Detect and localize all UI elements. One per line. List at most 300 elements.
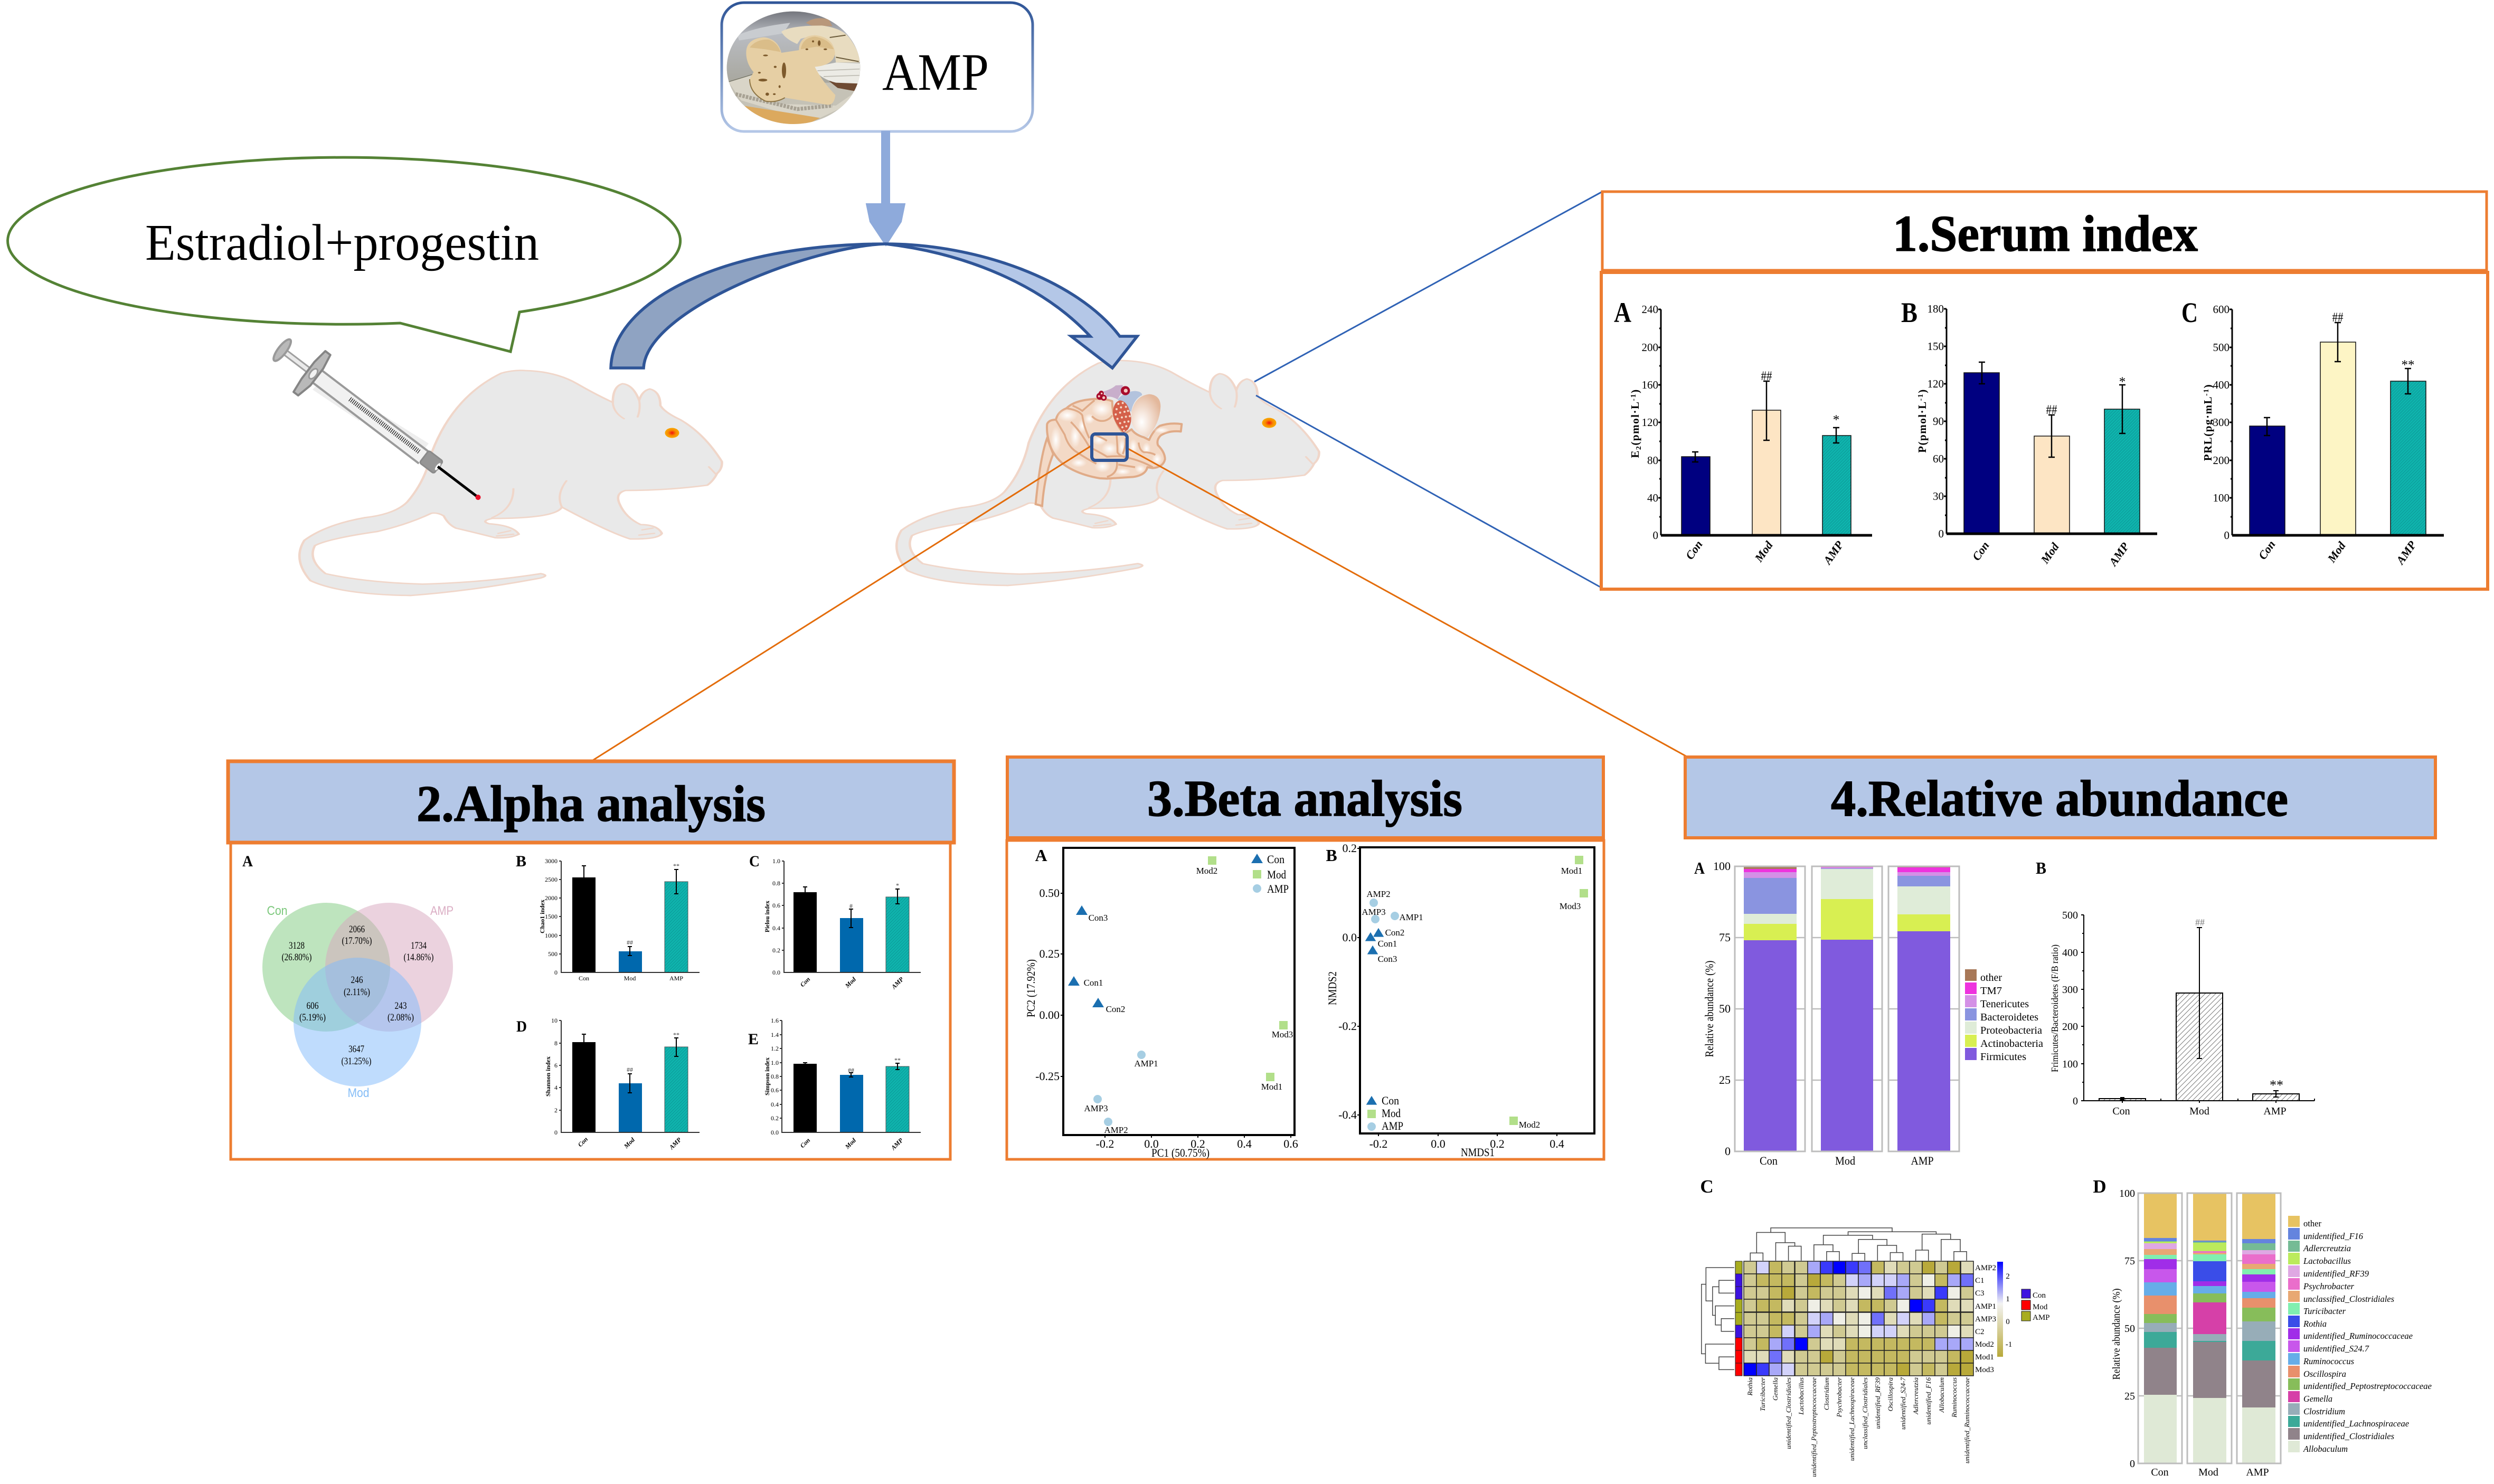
chart: Simpson bars: 1.4 [771,1031,779,1038]
chart: F/B ratio bars: ## [2195,917,2205,928]
chart: Pielou bars: Pielou index [763,901,771,932]
chart: PRL bars: 500 [2213,341,2230,354]
chart: Simpson bars: AMP [889,1136,905,1152]
chart: Venn diagram: 1734 [411,940,427,951]
chart: Chao1 bars: ** [673,862,679,869]
chart: Venn diagram: (5.19%) [299,1012,326,1023]
heatmap dendrogram: columns [1750,1228,1967,1261]
chart: Venn diagram: (2.08%) [388,1012,414,1023]
chart: Chao1 bars: 1500 [545,913,558,920]
chart: Chao1 bars: ## [627,939,633,946]
chart: NMDS scatter: Con [1382,1094,1399,1107]
chart: Chao1 bars: B [516,853,526,870]
heatmap row labels: C2 [1975,1328,1985,1336]
chart: PCoA scatter: Mod [1267,868,1286,881]
legend: phyla: Proteobacteria [1980,1025,2042,1036]
connector lines: gut to panels [593,446,1696,762]
chart: Shannon bars: D [516,1018,527,1035]
chart: genus stacked bars: D [2093,1176,2106,1197]
chart: PRL bars: 600 [2213,303,2230,316]
chart: Venn diagram: 243 [395,1000,407,1012]
heatmap column labels: unidentified_Clostridiales [1784,1377,1792,1449]
chart: PRL bars [2181,297,2444,568]
chart: NMDS scatter: 0.0 [1342,931,1357,944]
legend: genera: Lactobacillus [2303,1256,2351,1266]
legend: genera: unidentified_Clostridiales [2303,1431,2394,1441]
chart: NMDS scatter: NMDS1 [1461,1146,1495,1159]
chart: NMDS scatter: -0.4 [1338,1108,1357,1121]
heatmap column labels: Adlercreutzia [1912,1377,1920,1415]
chart: Venn diagram: 3647 [348,1044,364,1055]
chart: Shannon bars: Con [577,1136,589,1148]
chart: Simpson bars: 0.6 [771,1086,779,1094]
heatmap column labels: Psychrobacter [1835,1377,1843,1417]
chart: E2 bars: E [1629,450,1641,458]
chart: Chao1 bars: AMP [669,975,683,982]
chart: Pielou bars: AMP [890,975,905,991]
chart: genus stacked bars: 75 [2124,1255,2135,1267]
chart: E2 bars: 0 [1652,529,1658,542]
chart: Chao1 bars: Con [579,975,589,982]
heatmap column labels: unidentified_S24-7 [1899,1377,1907,1430]
heatmap column labels: unidentified_F16 [1924,1377,1932,1425]
chart: NMDS scatter: 0.4 [1550,1137,1564,1150]
heatmap row labels: C1 [1975,1277,1985,1285]
legend: phyla: Bacteroidetes [1980,1012,2038,1023]
chart: PCoA scatter: -0.25 [1035,1070,1060,1083]
chart: P bars: P(pmol·L [1916,401,1929,453]
rat: treated model with organs [896,361,1319,585]
heatmap row labels: C3 [1975,1289,1985,1298]
panel 2: alpha analysis [228,761,954,1159]
chart: F/B ratio bars: 100 [2062,1058,2078,1070]
chart: phylum stacked bars: 0 [1725,1145,1731,1158]
chart: Simpson bars: 0.4 [771,1101,779,1108]
legend: genera: Rothia [2303,1319,2327,1329]
speech bubble: Estradiol+progestin: Estradiol+progestin [145,214,539,271]
chart: Chao1 bars: 1000 [545,932,558,939]
AMP box: AMP [882,43,989,101]
heatmap colour bar: 0 [2006,1318,2010,1326]
chart: PCoA scatter: 0.50 [1039,886,1060,900]
chart: E2 bars: A [1614,297,1631,328]
legend: genera: unidentified_Lachnospiraceae [2303,1419,2409,1429]
chart: phylum stacked bars: A [1694,858,1705,877]
chart: phylum stacked bars: 100 [1713,859,1731,873]
chart: Shannon bars: AMP [667,1136,683,1151]
chart: F/B ratio bars: 300 [2062,984,2078,996]
chart: P bars: -1 [1917,393,1925,401]
chart: PCoA scatter: 0.00 [1039,1008,1060,1022]
chart: PRL bars: Mod [2325,539,2348,565]
chart: genus stacked bars: 50 [2124,1323,2135,1335]
chart: E2 bars: -1 [1630,393,1638,401]
chart: P bars: Mod [2038,540,2062,566]
chart: PRL bars: 400 [2213,379,2230,391]
chart: Venn diagram: (26.80%) [282,952,311,963]
heatmap column labels: unidentified_Peptostreptococcaceae [1810,1377,1818,1477]
chart: PCoA scatter: AMP1 [1134,1058,1158,1069]
chart: PCoA scatter: AMP3 [1084,1103,1108,1113]
chart: Venn diagram: (2.11%) [344,987,370,998]
chart: E2 bars: 2 [1635,446,1643,450]
heatmap column labels [1746,1377,1971,1477]
legend: genera: Turicibacter [2303,1306,2346,1316]
panel 3: beta analysis [1007,757,1604,1159]
heatmap column labels: unidentified_Lachnospiraceae [1848,1377,1856,1461]
chart: F/B ratio bars: ** [2270,1077,2283,1093]
heatmap colour bar: -1 [2006,1340,2012,1349]
rat: injected model [299,371,722,596]
legend: phyla: Tenericutes [1980,998,2029,1010]
chart: Chao1 bars [516,853,700,982]
heading: 3.Beta analysis [1007,757,1603,838]
chart: NMDS scatter: AMP [1382,1119,1403,1132]
chart: P bars: ## [2046,403,2057,417]
chart: Pielou bars: * [896,882,899,889]
chart: PCoA scatter: Con3 [1089,913,1108,923]
chart: Simpson bars: 0.8 [771,1073,779,1080]
chart: P bars: 120 [1927,377,1944,390]
heading: 2.Alpha analysis: 2.Alpha analysis [417,776,766,832]
chart: NMDS scatter: Con2 [1385,928,1404,938]
heatmap cells [1744,1261,1973,1376]
heatmap colour bar [1997,1262,2012,1357]
chart: P bars: 30 [1933,490,1944,503]
heatmap row labels: Mod3 [1975,1366,1994,1374]
legend: genera: Gemella [2303,1394,2332,1404]
chart: PCoA scatter: 0.2 [1191,1137,1205,1150]
chart: Simpson bars: 1.6 [771,1017,779,1024]
chart: NMDS scatter: -0.2 [1369,1137,1387,1150]
chart: genus heatmap [1700,1176,2050,1477]
chart: Simpson bars: Simpson index [763,1057,771,1095]
chart: P bars: AMP [2106,540,2132,569]
chart: phylum stacked bars: Con [1760,1154,1778,1167]
chart: Pielou bars: # [849,902,853,910]
chart: NMDS scatter: Mod3 [1560,901,1581,911]
chart: Simpson bars: 0.0 [771,1129,779,1136]
chart: Shannon bars: Shannon index [544,1056,552,1097]
heatmap group legend: Con [2033,1291,2046,1300]
legend: genera: unidentified_F16 [2303,1231,2363,1241]
chart: E2 bars [1614,297,1872,568]
chart: NMDS scatter: Con3 [1378,954,1397,964]
chart: E2 bars: 240 [1642,303,1658,316]
chart: Venn diagram: A [242,853,253,870]
chart: P bars: 90 [1933,415,1944,428]
chart: Simpson bars: ** [894,1056,901,1064]
chart: PCoA scatter: PC2 (17.92%) [1024,959,1037,1017]
chart: F/B ratio bars: Mod [2189,1105,2209,1117]
heatmap row labels: Mod1 [1975,1353,1994,1362]
chart: phylum stacked bars: AMP [1911,1154,1933,1167]
heatmap colour bar: 1 [2006,1295,2010,1303]
chart: E2 bars: 40 [1647,491,1658,504]
chart: PCoA scatter: PC1 (50.75%) [1151,1146,1210,1159]
chart: Shannon bars [516,1017,700,1151]
chart: NMDS scatter: 0.0 [1431,1137,1446,1150]
chart: PCoA scatter: Mod2 [1196,866,1217,876]
chart: Pielou bars: 0.8 [772,880,780,887]
chart: PCoA scatter [1024,846,1298,1159]
chart: Venn diagram: (17.70%) [342,935,372,947]
chart: E2 bars: AMP [1820,538,1846,568]
AMP box [722,3,1033,131]
chart: Shannon bars: Mod [622,1136,637,1150]
heatmap column labels: unidentified_RF39 [1874,1377,1882,1429]
legend: genera: Ruminococcus [2303,1356,2354,1366]
chart: genus stacked bars: 25 [2124,1391,2135,1402]
chart: Pielou bars: Mod [843,975,858,990]
legend: phyla [1965,969,2043,1063]
heatmap column labels: unidentified_Ruminococcaceae [1963,1377,1971,1463]
chart: PRL bars: -1 [2203,388,2210,396]
chart: PRL bars: AMP [2393,538,2419,568]
heatmap column labels: Oscillospira [1886,1377,1894,1411]
chart: Venn diagram: 3128 [289,940,305,951]
chart: genus stacked bars: 0 [2130,1458,2135,1470]
chart: E2 bars: Con [1683,538,1705,562]
chart: PCoA scatter: AMP2 [1104,1125,1128,1135]
chart: Venn diagram: 246 [351,975,363,986]
legend: phyla: TM7 [1980,985,2002,997]
chart: Chao1 bars: 0 [554,969,558,976]
icon: bread photo oval [723,9,864,127]
chart: NMDS scatter: Mod [1382,1107,1401,1120]
chart: Pielou bars: C [749,853,760,870]
chart: P bars: 60 [1933,452,1944,465]
heatmap row labels: AMP3 [1975,1315,1996,1324]
chart: Venn diagram: 2066 [349,924,365,935]
chart: PCoA scatter: 0.0 [1144,1137,1159,1150]
legend: genera: Oscillospira [2303,1369,2346,1379]
chart: Simpson bars: E [748,1031,759,1048]
chart: Pielou bars: 0.4 [772,924,780,932]
chart: PCoA scatter: Con2 [1106,1004,1125,1014]
heatmap colour bar: 2 [2006,1272,2010,1281]
chart: Shannon bars: 8 [554,1039,558,1047]
heading: 1.Serum index: 1.Serum index [1893,205,2198,262]
chart: Chao1 bars: 3000 [545,857,558,865]
icon: gut sample square [1092,434,1127,460]
chart: P bars [1901,297,2157,569]
chart: PCoA scatter: Con1 [1084,978,1103,988]
chart: phylum stacked bars: 75 [1719,931,1731,944]
legend: genera: unclassified_Clostridiales [2303,1294,2394,1304]
connector lines: serum [1254,192,1602,588]
chart: F/B ratio bars: 400 [2062,947,2078,959]
heatmap group legend [2021,1289,2050,1322]
chart: NMDS scatter: 0.2 [1342,842,1357,855]
chart: Simpson bars: Con [799,1137,811,1149]
chart: Chao1 bars: 500 [548,950,558,958]
heatmap column labels: Ruminococcus [1950,1377,1958,1418]
chart: E2 bars: 80 [1647,454,1658,467]
chart: Venn diagram: Con [267,904,287,918]
chart: NMDS scatter [1326,842,1594,1159]
chart: P bars: B [1901,297,1917,328]
heatmap column labels: unclassified_Clostridiales [1861,1377,1869,1449]
heatmap annotation column [1735,1261,1742,1376]
legend: genera: unidentified_S24.7 [2303,1344,2369,1354]
chart: genus stacked bars: Con [2151,1467,2169,1478]
chart: Shannon bars: 10 [551,1017,558,1024]
chart: Simpson bars: Mod [843,1136,858,1151]
chart: E2 bars: * [1833,413,1839,427]
chart: PRL bars: ** [2401,358,2415,372]
arrow: curved treatment arrow [611,244,1137,368]
heading: 4.Relative abundance: 4.Relative abundance [1831,770,2288,827]
chart: NMDS scatter: 0.2 [1490,1137,1505,1150]
chart: F/B ratio bars: 200 [2062,1021,2078,1033]
chart: PRL bars: ) [2202,384,2214,388]
chart: Shannon bars: 0 [554,1129,558,1136]
chart: Shannon bars: 6 [554,1062,558,1069]
speech bubble: Estradiol+progestin [8,157,681,352]
legend: genera: Clostridium [2303,1406,2345,1416]
chart: genus stacked bars: 100 [2119,1188,2135,1199]
chart: E2 bars: 160 [1642,379,1658,391]
chart: NMDS scatter: B [1326,846,1337,865]
stacked bar: Con [2144,1193,2177,1463]
chart: NMDS scatter: -0.2 [1338,1019,1357,1033]
legend: genera: unidentified_RF39 [2303,1269,2369,1279]
legend: genera: unidentified_Peptostreptococcaceae [2303,1381,2432,1391]
chart: P bars: Con [1969,539,1992,563]
chart: F/B ratio bars: B [2036,858,2046,877]
chart: phylum stacked bars: 25 [1719,1073,1731,1086]
chart: Chao1 bars: Chao1 index [539,900,546,933]
chart: Pielou bars: 0.6 [772,902,780,909]
icon: intestine and organs [1036,385,1182,506]
chart: NMDS scatter: Con1 [1378,939,1397,949]
chart: Shannon bars: 2 [554,1107,558,1114]
chart: genus heatmap: C [1700,1176,1714,1197]
chart: PRL bars: 0 [2224,529,2230,542]
chart: PCoA scatter: Con [1267,853,1284,866]
chart: Venn diagram: AMP [430,904,454,918]
chart: F/B ratio bars: Con [2112,1105,2130,1117]
chart: F/B ratio bars: AMP [2263,1105,2287,1117]
legend: genera: Psychrobacter [2303,1281,2354,1291]
chart: E2 bars: ## [1761,369,1772,383]
chart: PCoA scatter: Mod1 [1261,1082,1282,1092]
chart: Venn diagram [242,853,454,1100]
chart: E2 bars: 200 [1642,341,1658,354]
legend: phyla: Firmicutes [1980,1051,2026,1063]
heatmap column labels: Allobaculum [1938,1377,1945,1413]
chart: Pielou bars: 0.2 [772,947,780,954]
chart: F/B ratio bars [2036,858,2314,1117]
chart: Chao1 bars: 2000 [545,894,558,902]
chart: NMDS scatter: AMP1 [1399,912,1423,922]
panel 1: serum index [1601,192,2488,589]
heading: 1.Serum index [1602,192,2487,270]
chart: genus stacked bars [2093,1176,2432,1478]
chart: PRL bars: ## [2332,310,2344,325]
chart: F/B ratio bars: 500 [2062,910,2078,921]
chart: Venn diagram: Mod [347,1086,370,1100]
legend: phyla: Actinobacteria [1980,1038,2043,1050]
chart: E2 bars: Mod [1752,538,1775,565]
chart: genus stacked bars: Relative abundance (%) [2111,1288,2122,1380]
chart: phylum stacked bars [1694,858,2043,1167]
chart: Pielou bars: 1.0 [772,857,780,865]
heatmap row labels: AMP2 [1975,1264,1996,1272]
chart: Pielou bars [749,853,921,991]
heatmap group legend: AMP [2033,1313,2050,1322]
chart: PRL bars: 300 [2213,416,2230,429]
panel 4: relative abundance [1685,757,2435,1478]
chart: NMDS scatter: AMP3 [1362,907,1386,917]
chart: PCoA scatter: A [1035,846,1047,865]
heading: 3.Beta analysis: 3.Beta analysis [1147,770,1462,827]
chart: Simpson bars [748,1017,921,1152]
legend: genera: unidentified_Ruminococcaceae [2303,1331,2413,1341]
heatmap row labels: Mod2 [1975,1340,1994,1349]
chart: E2 bars: 120 [1642,416,1658,429]
chart: PCoA scatter: 0.4 [1237,1137,1252,1150]
chart: P bars: 150 [1927,340,1944,353]
chart: Chao1 bars: 2500 [545,876,558,883]
chart: Shannon bars: 4 [554,1084,558,1091]
chart: PRL bars: 100 [2213,491,2230,504]
chart: F/B ratio bars: 0 [2073,1095,2078,1107]
chart: PRL bars: C [2181,297,2198,328]
chart: Venn diagram: (14.86%) [403,952,434,963]
chart: PCoA scatter: Mod3 [1272,1029,1293,1039]
chart: NMDS scatter: AMP2 [1366,889,1391,899]
heatmap column labels: Lactobacillus [1797,1377,1805,1415]
heatmap row labels [1975,1264,1996,1374]
chart: phylum stacked bars: 50 [1719,1002,1731,1015]
chart: Pielou bars: Con [799,976,811,988]
heatmap dendrogram: rows [1702,1268,1734,1369]
chart: Simpson bars: 0.2 [771,1114,779,1122]
legend: phyla: other [1980,972,2002,984]
arrow: AMP down [866,131,905,245]
heatmap column labels: Rothia [1746,1377,1754,1396]
heatmap column labels: Clostridium [1822,1377,1830,1410]
chart: Venn diagram: 606 [306,1000,319,1012]
legend: genera: Allobaculum [2303,1444,2348,1454]
chart: Simpson bars: 1.2 [771,1045,779,1052]
heading: 2.Alpha analysis [228,761,954,843]
chart: P bars: 0 [1939,527,1944,540]
chart: F/B ratio bars: Frimicutes/Bacteroidetes (F/B ratio) [2049,944,2061,1072]
chart: Shannon bars: ## [627,1066,633,1073]
chart: NMDS scatter: NMDS2 [1326,971,1339,1005]
chart: E2 bars: ) [1629,389,1641,393]
chart: PCoA scatter: 0.25 [1039,947,1060,960]
legend: genera: Adlercreutzia [2303,1243,2351,1253]
chart: NMDS scatter: Mod2 [1519,1120,1540,1130]
chart: PRL bars: Con [2255,538,2278,562]
stacked bar: Mod [2193,1193,2226,1463]
chart: PRL bars: PRL(pg·mL [2202,396,2214,461]
legend: genera [2288,1216,2432,1454]
stacked bar: AMP [2242,1193,2275,1463]
heatmap column labels: Turicibacter [1759,1377,1766,1411]
chart: NMDS scatter: Mod1 [1561,866,1582,876]
heatmap group legend: Mod [2033,1303,2048,1311]
chart: genus stacked bars: AMP [2246,1467,2269,1478]
chart: Venn diagram: (31.25%) [341,1056,372,1067]
heatmap column labels: Gemella [1771,1377,1779,1401]
chart: Pielou bars: 0.0 [772,969,780,976]
chart: P bars: ) [1916,389,1929,393]
